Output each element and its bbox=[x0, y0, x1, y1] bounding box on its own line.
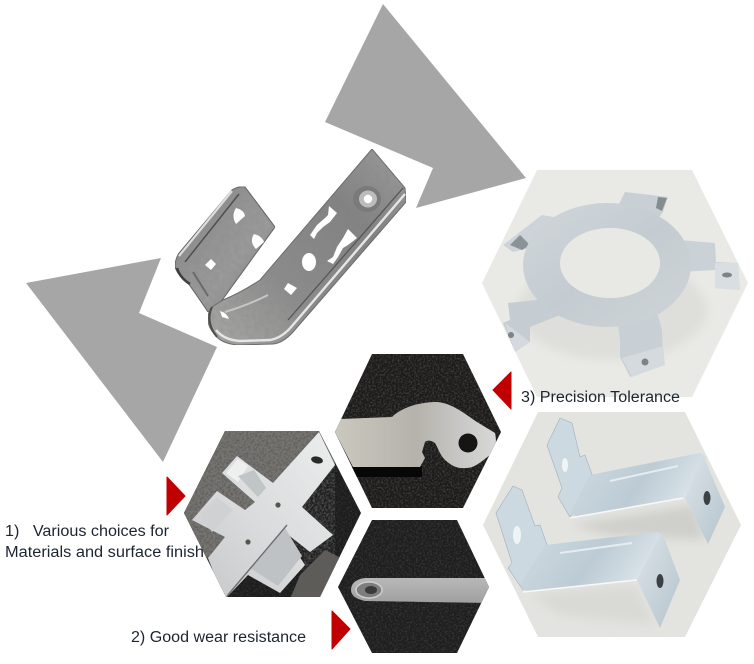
washer hole bbox=[353, 186, 381, 212]
label: good wear resistance: 2) Good wear resistance bbox=[131, 629, 306, 646]
icon: J-hook metal part bbox=[175, 149, 406, 345]
lower bracket bbox=[496, 486, 680, 628]
hexagon photo: two L brackets bbox=[482, 410, 744, 640]
label: materials and surface finish: Materials and surface finish bbox=[5, 544, 204, 561]
hexagon photo: steel strip on dark surface bbox=[336, 518, 492, 656]
label: various choices: 1) Various choices for bbox=[5, 523, 169, 540]
label: precision tolerance: 3) Precision Tolerance bbox=[521, 389, 680, 406]
red arrow marker: good wear resistance bbox=[332, 611, 350, 649]
red arrow marker: various choices bbox=[167, 477, 185, 515]
gray arrow: top right bbox=[325, 4, 526, 208]
hexagon photo: cross-shaped stamped part bbox=[182, 429, 364, 599]
upper bracket bbox=[547, 418, 725, 544]
hexagon photo: washer with tabs bbox=[480, 168, 750, 400]
hexagon photo: stamped steel latch on dark surface bbox=[333, 352, 503, 510]
slots cut through the hook bbox=[205, 206, 357, 319]
red arrow marker: precision tolerance bbox=[493, 372, 511, 409]
gray arrow: lower left bbox=[26, 258, 217, 462]
